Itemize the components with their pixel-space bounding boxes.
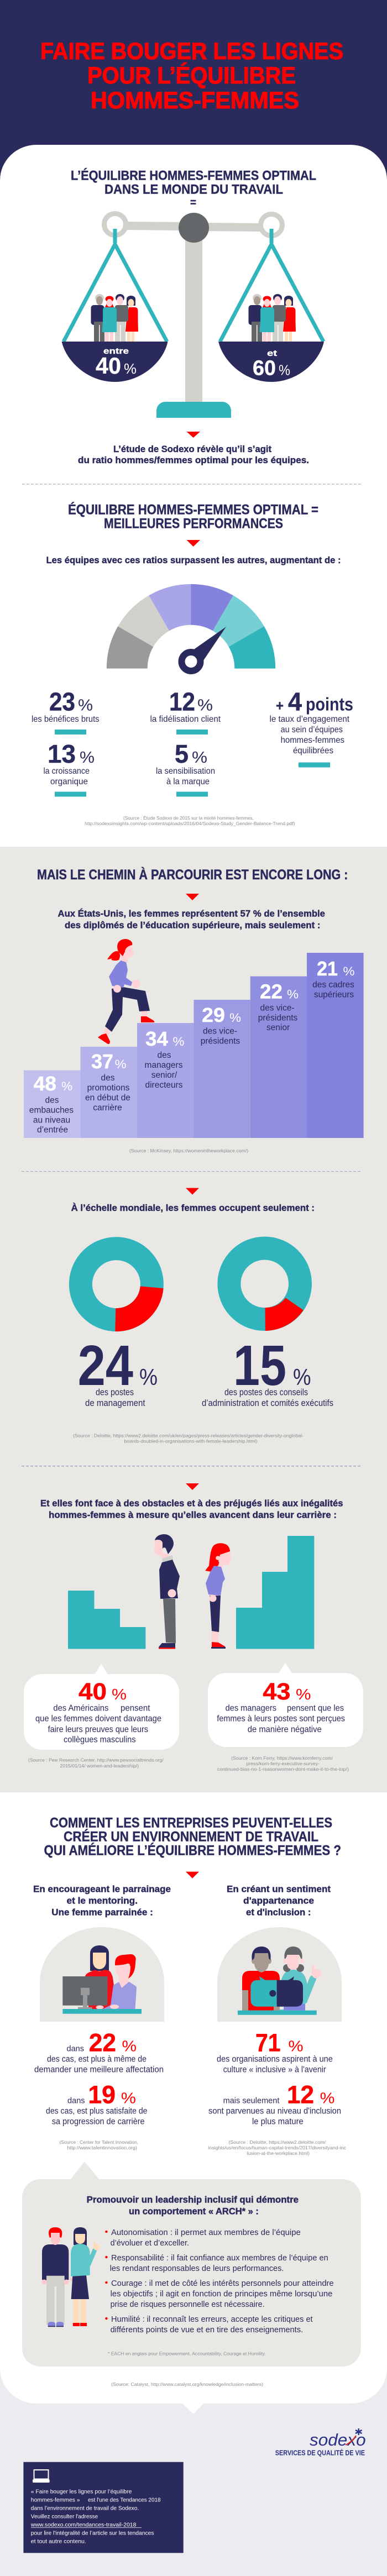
stat: 23 percent: 23 (49, 688, 75, 716)
subheading: obstacles (40, 1498, 343, 1520)
scale illustration (62, 213, 324, 418)
bullet: Autonomisation (105, 2228, 301, 2248)
callout: 43 percent: 43 (263, 1678, 290, 1705)
stat: 5 percent: % (192, 749, 207, 767)
step: 22 percent (250, 976, 307, 1138)
footer text: et tout autre contenu. (31, 2538, 86, 2545)
step: 37 percent: carrière (93, 1103, 122, 1113)
stat: 24 percent of management: de management (85, 1398, 145, 1408)
callout: 43 percent: de manière négative (248, 1725, 322, 1734)
stat: 71 percent: 71 (255, 2029, 281, 2057)
woman standing (205, 1543, 231, 1649)
stat: 12 percent (150, 688, 221, 734)
step: 34 percent: directeurs (145, 1080, 183, 1090)
stat: 12 percent: la fidélisation client (150, 715, 221, 724)
step: 29 percent (194, 1000, 250, 1138)
bullet: Autonomisation: d’évoluer et d’exceller. (111, 2238, 189, 2248)
title: FAIRE BOUGER LES LIGNES (40, 38, 343, 65)
stat: 15 percent of boards: 15 (233, 1334, 286, 1397)
heading: long road: MAIS LE CHEMIN À PARCOURIR EST ENCORE LONG : (37, 867, 348, 883)
footer text: pour lire l'intégralité de l’article sur les tendances (31, 2530, 154, 2537)
source: Deloitte (208, 2139, 347, 2156)
subheading: worldwide: À l’échelle mondiale, les femmes occupent seulement : (71, 1203, 315, 1213)
right pan label (253, 349, 290, 380)
stat: 12 percent: 12 (169, 688, 195, 716)
callout: 43 percent: % (296, 1686, 311, 1703)
step: 37 percent: promotions (87, 1083, 130, 1093)
header band (0, 0, 387, 188)
stat: 13 percent: % (80, 749, 95, 767)
step: 22 percent: senior (266, 1023, 290, 1032)
column heading: mentoring: En encourageant le parrainage (33, 1884, 171, 1895)
step: 22 percent: % (287, 988, 299, 1001)
stat: plus 4 points: hommes-femmes (281, 736, 344, 745)
stat: 19 percent: 19 (88, 2081, 116, 2109)
stat: 22 percent: des cas, est plus à même de (47, 2055, 147, 2064)
step: 48 percent: d’entrée (37, 1125, 68, 1135)
stat: 23 percent: % (78, 697, 93, 715)
heading: how can companies (44, 1816, 341, 1859)
callout: 43 percent: pensent que les (287, 1703, 344, 1713)
footer text: dans l’environnement de travail de Sodexo. (31, 2505, 139, 2512)
bullet: Responsabilité: les rendant responsables de leurs performances. (110, 2264, 284, 2273)
stat: 12 percent: 12 (287, 2081, 314, 2109)
step: 29 percent: des vice- (203, 1027, 237, 1036)
left pan strings (64, 229, 167, 342)
footer text: est l'une des Tendances 2018 (88, 2497, 161, 2504)
stat: 71 percent: % (288, 2038, 304, 2055)
callout: 40 percent: collègues masculins (64, 1735, 136, 1745)
gauge chart (107, 584, 275, 671)
left pan label: 40 (96, 353, 121, 379)
stat: 22 percent: dans (66, 2045, 84, 2054)
source: Pew (28, 1757, 164, 1769)
stat: 19 percent: sa progression de carrière (52, 2117, 145, 2127)
callout: 40 percent: pensent (121, 1703, 150, 1713)
stat: 5 percent: à la marque (166, 777, 210, 786)
right group of people (249, 294, 296, 342)
stat: 12 percent: % (320, 2090, 334, 2107)
callout: 43 percent: des managers (226, 1703, 276, 1713)
staircase bar chart (24, 953, 364, 1138)
source: Deloitte: insights/us/en/focus/human-capital-trends/2017/diversityand-inc (208, 2145, 347, 2150)
left group of people (91, 294, 138, 342)
stat: 22 percent: demander une meilleure affectation (34, 2065, 164, 2075)
stat: 5 percent (156, 739, 215, 797)
title: HOMMES-FEMMES (91, 87, 299, 114)
Sodexo logo (275, 2428, 366, 2457)
panel heading: Promouvoir un leadership inclusif qui démontre (87, 2195, 299, 2205)
source: Korn Ferry (217, 1755, 349, 1772)
bullet: Humilité: Humilité : il reconnaît les erreurs, accepte les critiques et (111, 2315, 313, 2324)
illustration: mentoring at computer (40, 1927, 164, 2022)
footer text: www.sodexo.com/tendances-travail-2018 (30, 2522, 137, 2528)
arrow (186, 894, 199, 900)
step: 37 percent: 37 (91, 1050, 113, 1073)
left pan label: % (124, 360, 137, 377)
right pan label: 60 (253, 357, 276, 380)
heading: optimal balance (71, 168, 316, 209)
subheading: Les équipes avec ces ratios surpassent les autres, augmentant de : (46, 555, 341, 565)
step: 34 percent (137, 1023, 194, 1138)
step: 48 percent: des (45, 1095, 59, 1105)
source (73, 1433, 304, 1444)
bullet: Responsabilité (105, 2253, 328, 2273)
column heading: inclusion: d'appartenance (243, 1896, 314, 1906)
stat: 13 percent: organique (50, 777, 88, 786)
footer text: « Faire bouger les lignes pour l’équilibre (31, 2489, 132, 2495)
column heading: inclusion: En créant un sentiment (227, 1884, 331, 1895)
source: boards-doubled-in-organisations-with-female-leadership.html) (124, 1439, 258, 1444)
heading: optimal balance: L’ÉQUILIBRE HOMMES-FEMMES OPTIMAL (71, 168, 316, 183)
arrow (187, 540, 200, 547)
stat: plus 4 points: au sein d’équipes (281, 725, 343, 734)
arrow (186, 1188, 199, 1195)
bullet: Humilité: différents points de vue et en tire des enseignements. (111, 2325, 303, 2334)
source (85, 815, 295, 826)
callout: 43 percent (208, 1662, 363, 1747)
left pan label: entre (103, 347, 129, 356)
stat: 22 percent: 22 (89, 2029, 116, 2057)
step: 34 percent: % (172, 1035, 185, 1048)
source: (Source : Étude Sodexo de 2015 sur la mixité hommes-femmes, (123, 815, 254, 821)
column heading: inclusion (227, 1884, 331, 1918)
step: 29 percent: % (229, 1011, 241, 1025)
stat: 13 percent: la croissance (43, 767, 90, 776)
stat: 12 percent: % (197, 697, 213, 715)
bullet: Courage (105, 2279, 334, 2309)
step: 22 percent: des vice- (260, 1004, 295, 1013)
step: 22 percent: présidents (258, 1013, 298, 1022)
left pan label (96, 347, 137, 379)
stat: 24 percent of management (78, 1334, 158, 1408)
stat: 15 percent of boards (202, 1334, 333, 1408)
source: Center for Talent Innovation: (Source : Center for Talent Innovation, (60, 2139, 138, 2145)
Sodexo logo: SERVICES DE QUALITÉ DE VIE (275, 2448, 365, 2457)
stat: 5 percent: la sensibilisation (156, 767, 215, 776)
stat: 12 percent: sont parvenues au niveau d'inclusion (208, 2107, 341, 2116)
callout: 43 percent: femmes à leurs postes sont perçues (217, 1714, 345, 1724)
source: http://sodexoinsights.com/wp-content/uploads/2016/04/Sodexo-Study_Gender-Balance-Trend.pdf) (85, 821, 295, 826)
step: 21 percent (307, 953, 364, 1138)
arrow (187, 432, 200, 438)
stat: 12 percent: mais seulement (223, 2097, 279, 2106)
step: 29 percent: 29 (202, 1004, 225, 1026)
step: 48 percent: embauches (29, 1105, 74, 1115)
donut chart: 15 percent (229, 1248, 304, 1331)
stat: 23 percent: les bénéfices bruts (32, 715, 100, 724)
stat: 71 percent (217, 2029, 333, 2075)
source: (Source : McKinsey, https://womenintheworkplace.com/) (129, 1148, 248, 1153)
study text (78, 444, 309, 465)
step: 34 percent: managers (145, 1061, 183, 1070)
step: 21 percent: % (343, 964, 355, 978)
callout: 40 percent: 40 (79, 1678, 107, 1705)
step: 48 percent: 48 (34, 1072, 56, 1095)
Sodexo logo: sodexo (310, 2430, 366, 2449)
right pan (218, 342, 324, 382)
heading: optimal balance: DANS LE MONDE DU TRAVAIL (104, 182, 283, 197)
bullet: Autonomisation: Autonomisation : il permet aux membres de l’équipe (111, 2228, 301, 2237)
step: 34 percent: 34 (145, 1027, 168, 1050)
panel: inclusive leadership (22, 2161, 361, 2367)
bullet: Responsabilité: Responsabilité : il fait confiance aux membres de l’équipe en (111, 2253, 328, 2263)
heading: performance: MEILLEURES PERFORMANCES (104, 516, 283, 532)
heading: how can companies: QUI AMÉLIORE L’ÉQUILIBRE HOMMES-FEMMES ? (44, 1843, 341, 1859)
arrow (186, 1872, 199, 1879)
arrow (186, 1483, 199, 1490)
stat: 22 percent (34, 2029, 164, 2075)
man and woman illustration (42, 2227, 100, 2327)
source: Pew: 2015/01/14/ women-and-leadership/) (60, 1763, 139, 1769)
step: 37 percent: % (115, 1057, 127, 1071)
stat: 15 percent of boards: % (293, 1364, 311, 1390)
callout: 40 percent: faire leurs preuves que leurs (48, 1725, 148, 1734)
subheading: United States: Aux États-Unis, les femmes représentent 57 % de l’ensemble (57, 909, 325, 919)
stat: 19 percent: % (121, 2090, 136, 2107)
right pan label: % (279, 361, 290, 378)
step: 22 percent: 22 (260, 980, 283, 1003)
source: Pew: (Source : Pew Research Center, http://www.pewsocialtrends.org/ (28, 1757, 164, 1763)
stat: plus 4 points: 4 (288, 688, 302, 716)
footer text: hommes-femmes » (31, 2497, 80, 2504)
callout: 40 percent: % (112, 1686, 127, 1703)
stat: 23 percent (32, 688, 100, 734)
source: Deloitte: lusion-at-the-workplace.html) (247, 2150, 310, 2156)
panel heading: un comportement « ARCH* » : (129, 2207, 259, 2217)
step: 21 percent: des cadres (312, 980, 354, 990)
footer box (23, 2462, 184, 2553)
right ascending stairs (236, 1536, 314, 1649)
bullet: Courage: prise de risques personnelle est nécessaire. (111, 2300, 265, 2309)
source: Catalyst: (Source: Catalyst, http://www.catalyst.org/knowledge/inclusion-matters) (111, 2381, 263, 2387)
heading: optimal balance: = (190, 197, 196, 209)
stat: plus 4 points: + (276, 697, 284, 714)
study text: L’étude de Sodexo révèle qu’il s’agit (113, 444, 272, 454)
stat: 22 percent: % (122, 2038, 137, 2055)
source: Korn Ferry: (Source : Korn Ferry, https://www.kornferry.com/ (231, 1755, 333, 1761)
stat: 24 percent of management: % (139, 1364, 158, 1390)
stat: 71 percent: culture « inclusive » à l'avenir (223, 2065, 326, 2075)
step: 37 percent: en début de (85, 1093, 130, 1103)
needle (181, 627, 226, 671)
stat: 24 percent of management: des postes (96, 1387, 134, 1397)
column heading: mentoring (33, 1884, 171, 1918)
footnote: * EACH en anglais pour Empowerment, Accountability, Courage et Humility. (108, 2351, 266, 2357)
right pan strings (220, 229, 323, 342)
step: 37 percent (81, 1047, 137, 1138)
step: 29 percent: présidents (201, 1036, 240, 1046)
stat: 19 percent: des cas, est plus satisfaite de (46, 2107, 147, 2116)
puzzle speech pieces (250, 1976, 303, 2007)
stat: 13 percent (43, 739, 95, 797)
stat: plus 4 points: équilibrées (293, 746, 333, 756)
stat: 13 percent: 13 (48, 739, 76, 768)
stat: 15 percent of boards: d’administration et comités exécutifs (202, 1398, 333, 1408)
bullet: Courage: les objectifs ; il agit en fonction de principes même lorsqu’une (111, 2289, 332, 2299)
callout: 40 percent (24, 1664, 179, 1750)
source: Deloitte: (Source : Deloitte, https://www2.deloitte.com/ (228, 2139, 326, 2145)
step: 48 percent (24, 1071, 81, 1138)
step: 21 percent: 21 (317, 957, 338, 980)
step: 34 percent: senior/ (151, 1071, 177, 1080)
column heading: inclusion: et d'inclusion : (246, 1907, 311, 1918)
step: 37 percent: des (101, 1073, 115, 1083)
subheading: obstacles: Et elles font face à des obstacles et à des préjugés liés aux inégalités (40, 1498, 343, 1509)
illustration: inclusion puzzle (217, 1927, 342, 2022)
footer text (30, 2489, 161, 2545)
stat: plus 4 points (270, 688, 353, 767)
stat: 15 percent of boards: des postes des conseils (224, 1387, 308, 1397)
title (40, 38, 343, 114)
stat: 12 percent (208, 2081, 341, 2127)
source: (Source : Deloitte, https://www2.deloitte.com/uk/en/pages/press-releases/articles/gender-diversity-onglobal- (73, 1433, 304, 1438)
left pan (62, 342, 168, 382)
callout: 40 percent: que les femmes doivent davantage (35, 1714, 161, 1724)
source: Korn Ferry: continued-bias-no-1-reasonwomen-dont-make-it-to-the-top/) (217, 1766, 349, 1772)
stat: plus 4 points: le taux d’engagement (270, 715, 350, 724)
title: POUR L’ÉQUILIBRE (87, 62, 296, 89)
panel heading (87, 2195, 299, 2217)
grey section background (0, 847, 387, 1792)
icon: laptop (33, 2470, 50, 2483)
heading: performance: ÉQUILIBRE HOMMES-FEMMES OPTIMAL = (68, 502, 318, 518)
step: 34 percent: des (157, 1051, 171, 1060)
donut chart: 24 percent (81, 1248, 164, 1331)
source: Korn Ferry: press/korn-ferry-executive-survey- (247, 1761, 320, 1766)
heading: performance (68, 502, 318, 532)
man standing (154, 1534, 180, 1649)
ARCH bullet list (105, 2228, 334, 2334)
right pan label: et (267, 349, 277, 358)
subheading: United States: des diplômés de l’éducation supérieure, mais seulement : (65, 920, 321, 931)
stat: 19 percent (46, 2081, 147, 2127)
bullet: Courage: Courage : il met de côté les intérêts personnels pour atteindre (111, 2279, 334, 2288)
stat: plus 4 points: points (306, 694, 353, 715)
subheading: United States (57, 909, 325, 931)
stat: 71 percent: des organisations aspirent à une (217, 2055, 333, 2064)
column heading: mentoring: Une femme parrainée : (51, 1907, 153, 1918)
scale beam and post (104, 213, 282, 418)
source: Center for Talent Innovation (60, 2139, 138, 2150)
column heading: mentoring: et le mentoring. (66, 1896, 138, 1906)
bullet: Humilité (105, 2315, 313, 2334)
stat: 24 percent of management: 24 (78, 1334, 133, 1397)
stat: 19 percent: dans (67, 2097, 85, 2106)
heading: how can companies: CRÉER UN ENVIRONNEMENT DE TRAVAIL (64, 1829, 318, 1845)
stat: 5 percent: 5 (175, 739, 189, 768)
stat: 12 percent: le plus mature (252, 2117, 304, 2127)
step: 48 percent: % (61, 1079, 72, 1093)
heading: how can companies: COMMENT LES ENTREPRISES PEUVENT-ELLES (50, 1816, 332, 1831)
study text: du ratio hommes/femmes optimal pour les équipes. (78, 455, 309, 465)
left descending stairs (68, 1591, 145, 1649)
source: Center for Talent Innovation: http://www.talentinnovation.org) (67, 2145, 137, 2150)
subheading: obstacles: hommes-femmes à mesure qu’elles avancent dans leur carrière : (49, 1509, 337, 1520)
step: 21 percent: supérieurs (314, 990, 354, 999)
footer text: Veuillez consulter l'adresse (31, 2514, 98, 2520)
callout: 40 percent: des Américains (53, 1703, 108, 1713)
step: 48 percent: au niveau (33, 1116, 70, 1125)
climbing woman (98, 939, 154, 1044)
